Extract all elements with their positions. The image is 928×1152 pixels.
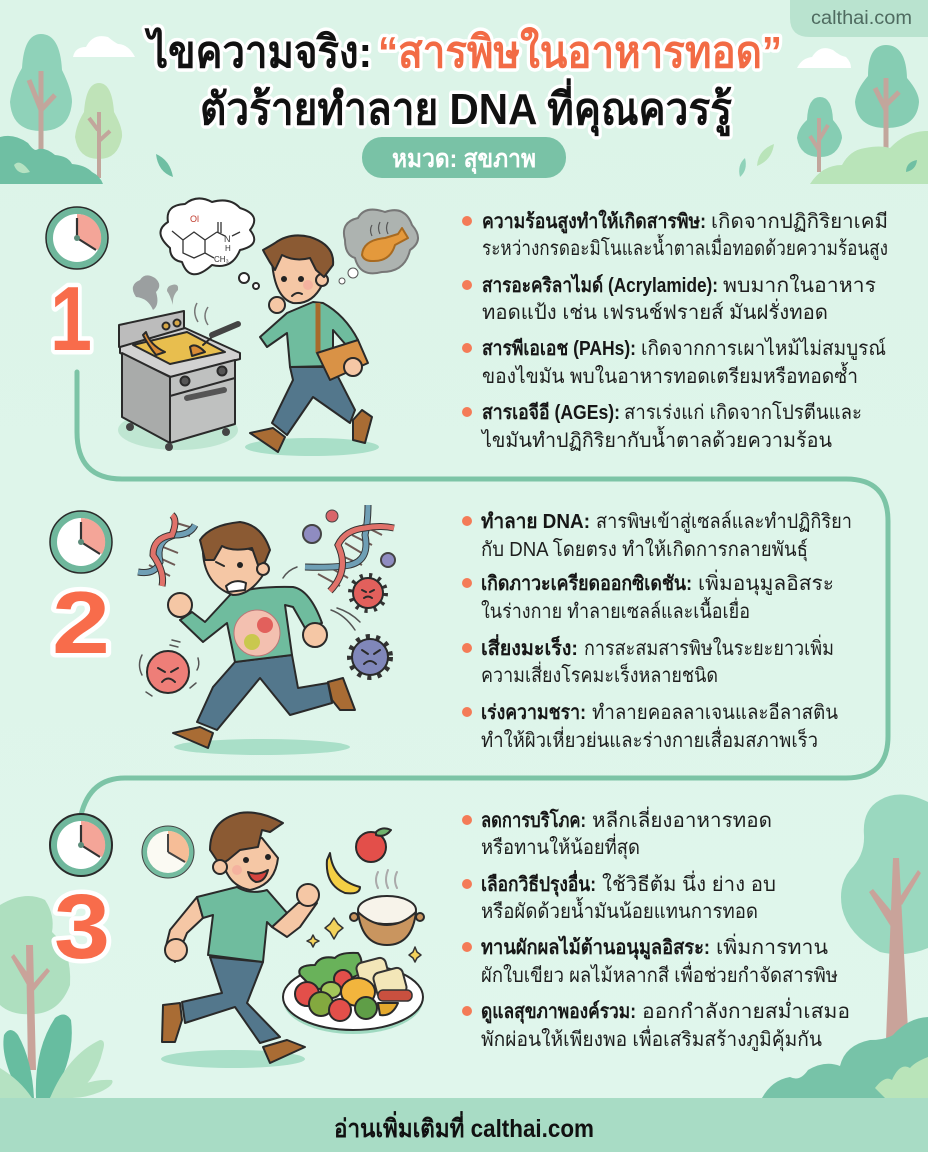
panel: section 2 text: ทำลาย DNA:	[481, 511, 590, 533]
panel: section 3 text: เลือกวิธีปรุงอื่น:	[481, 869, 596, 897]
panel: section 1 text: สารเอจีอี (AGEs):	[482, 401, 620, 424]
panel: section 1 text: สารเร่งแก่ เกิดจากโปรตีนและ	[624, 401, 862, 424]
category pill	[362, 137, 566, 178]
decoration: top-right trees and bush	[739, 45, 928, 184]
connector path linking the sections	[77, 372, 888, 815]
decoration: bottom-right tree and bush	[762, 794, 928, 1098]
icon: banana	[327, 853, 360, 893]
clock 2	[50, 511, 112, 573]
thought bubble: chemical structure: CH₃	[214, 255, 229, 264]
site tab: calthai.com: calthai.com	[811, 8, 912, 29]
illustration: plate of healthy food	[283, 953, 423, 1034]
panel: section 2 text: สารพิษเข้าสู่เซลล์และทำปฏิกิริยา	[596, 510, 852, 534]
site tab: calthai.com	[790, 0, 928, 37]
panel: section 3 text: หรือทานให้น้อยที่สุด	[481, 833, 640, 860]
illustration: DNA helix left	[138, 515, 195, 586]
panel: section 1 text: สารพีเอเอช (PAHs):	[482, 337, 636, 360]
panel: section 3 text: หลีกเลี่ยงอาหารทอด	[592, 806, 772, 832]
panel: section 1 text: ทอดแป้ง เช่น เฟรนช์ฟรายส์ มันฝรั่งทอด	[482, 298, 828, 324]
panel: section 1 text: เกิดจากปฏิกิริยาเคมี	[711, 211, 888, 233]
panel: section 3 text: ทานผักผลไม้ต้านอนุมูลอิสระ:	[481, 935, 710, 961]
thought bubble: fried chicken	[339, 210, 418, 284]
panel: section 3 text: หรือผัดด้วยน้ำมันน้อยแทนการทอด	[481, 897, 758, 923]
panel: section 2 text: เกิดภาวะเครียดออกซิเดชัน:	[481, 572, 692, 595]
icon: sparkles	[307, 918, 421, 962]
title: ตัวร้ายทำลาย DNA ที่คุณควรรู้	[200, 78, 732, 137]
panel: section 1 text: ความร้อนสูงทำให้เกิดสารพิษ:	[482, 209, 706, 235]
character: happy man running	[161, 812, 319, 1068]
panel: section 3 text	[462, 806, 850, 1052]
panel: section 1 text: พบมากในอาหาร	[723, 274, 876, 297]
panel: section 2 text: ความเสี่ยงโรคมะเร็งหลายชนิด	[481, 661, 718, 687]
icon: apple	[356, 828, 391, 862]
panel: section 1 text: ของไขมัน พบในอาหารทอดเตรียมหรือทอดซ้ำ	[482, 362, 858, 388]
footer bar	[0, 1098, 928, 1152]
panel: section 2 text: การสะสมสารพิษในระยะยาวเพิ่ม	[584, 634, 834, 660]
clock small	[142, 826, 194, 878]
thought bubble: chemical structure: Ol	[190, 214, 199, 224]
panel: section 3 prevention	[50, 812, 424, 1068]
icon: rice bowl with steam	[350, 870, 424, 945]
panel: section 3 text: ดูแลสุขภาพองค์รวม:	[481, 1000, 636, 1025]
decoration: top-left trees and bush	[0, 34, 173, 184]
character: worried man walking	[245, 235, 379, 456]
footer bar: อ่านเพิ่มเติมที่ calthai.com	[334, 1111, 594, 1143]
panel: section 2 damage	[50, 505, 395, 755]
character: man running in pain	[168, 522, 355, 755]
panel: section 2 text: เพิ่มอนุมูลอิสระ	[698, 569, 834, 596]
panel: section 3 text: ออกกำลังกายสม่ำเสมอ	[642, 997, 850, 1023]
number 2: 2	[52, 573, 110, 672]
number 3: 3	[54, 876, 110, 978]
panel: section 2 text: ทำลายคอลลาเจนและอีลาสติน	[592, 702, 838, 724]
title: ไขความจริง:	[144, 26, 372, 77]
panel: section 2 text: ในร่างกาย ทำลายเซลล์และเนื้อเยื่อ	[481, 597, 750, 623]
thought bubble: chemical structure: H	[225, 244, 231, 253]
panel: section 3 text: พักผ่อนให้เพียงพอ เพื่อเสริมสร้างภูมิคุ้มกัน	[481, 1025, 822, 1052]
panel: section 1 text: ไขมันทำปฏิกิริยากับน้ำตาลด้วยความร้อน	[480, 426, 832, 452]
decoration: bottom-left tree and plants	[0, 896, 112, 1098]
title: “สารพิษในอาหารทอด”	[378, 26, 782, 77]
panel: section 1 text: สารอะคริลาไมด์ (Acrylamide):	[482, 273, 718, 297]
illustration: deep fryer with smoke	[118, 275, 240, 451]
number 1: 1	[50, 269, 92, 370]
panel: section 3 text: ผักใบเขียว ผลไม้หลากสี เพื่อช่วยกำจัดสารพิษ	[481, 961, 838, 987]
thought bubble: chemical structure	[160, 198, 259, 289]
panel: section 3 text: เพิ่มการทาน	[716, 933, 828, 959]
panel: section 1 text	[462, 209, 888, 452]
panel: section 1 causes	[46, 198, 418, 456]
panel: section 1 text: เกิดจากการเผาไหม้ไม่สมบูรณ์	[641, 337, 886, 361]
title	[144, 26, 782, 137]
panel: section 2 text: ทำให้ผิวเหี่ยวย่นและร่างกายเสื่อมสภาพเร็ว	[481, 726, 818, 752]
illustration: angry germs	[140, 567, 390, 696]
panel: section 2 text	[462, 510, 852, 752]
illustration: DNA helix right and small germs	[303, 505, 395, 591]
panel: section 2 text: กับ DNA โดยตรง ทำให้เกิดการกลายพันธุ์	[481, 538, 808, 562]
category pill: หมวด: สุขภาพ	[392, 145, 536, 175]
panel: section 3 text: ลดการบริโภค:	[481, 808, 586, 832]
thought bubble: chemical structure: N	[224, 234, 230, 244]
clock 3	[50, 814, 112, 876]
panel: section 2 text: เสี่ยงมะเร็ง:	[481, 633, 578, 660]
clock 1	[46, 207, 108, 269]
panel: section 2 text: เร่งความชรา:	[481, 702, 586, 724]
panel: section 3 text: ใช้วิธีต้ม นึ่ง ย่าง อบ	[602, 870, 776, 896]
